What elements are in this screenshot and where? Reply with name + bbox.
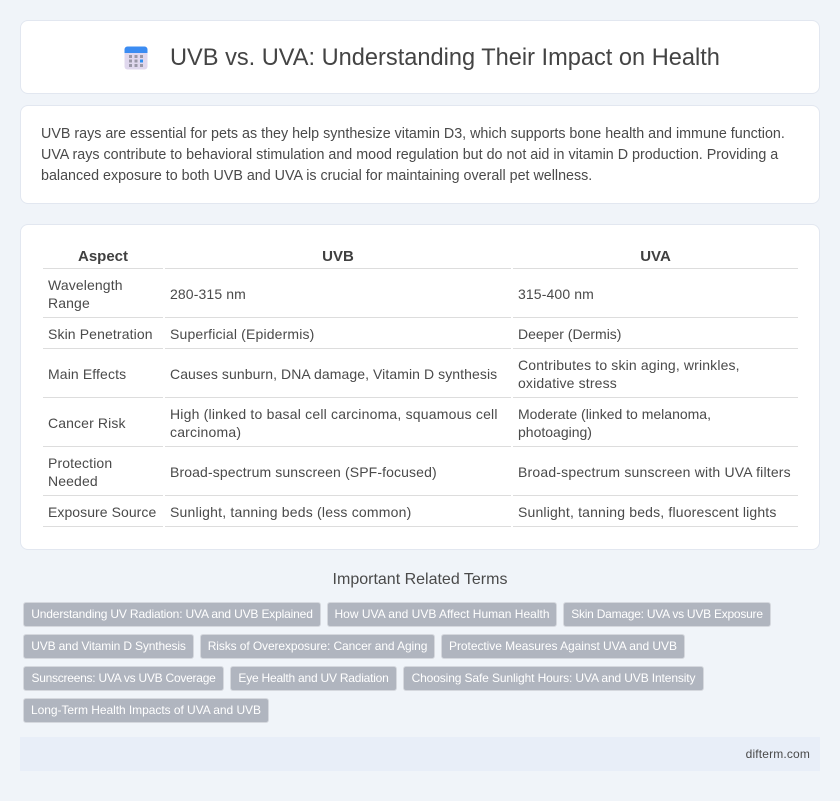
intro paragraph: UVA rays contribute to behavioral stimulation and mood regulation but do not aid in vitamin D production. Providing a [41, 147, 778, 163]
related terms tags: Skin Damage: UVA vs UVB Exposure [571, 607, 763, 621]
row: skin penetration: Skin Penetration [48, 326, 153, 342]
row: exposure source [48, 504, 777, 520]
related terms tags: Understanding UV Radiation: UVA and UVB Explained [31, 607, 313, 621]
comparison table panel [20, 224, 820, 550]
row: wavelength range: 315-400 nm [518, 286, 594, 302]
row: protection needed: Broad-spectrum sunscreen (SPF-focused) [170, 464, 437, 480]
intro paragraph [41, 126, 785, 184]
row: exposure source: Sunlight, tanning beds (less common) [170, 504, 411, 520]
intro paragraph: UVB rays are essential for pets as they help synthesize vitamin D3, which supports bone health and immune function. [41, 126, 785, 142]
related terms tags: Protective Measures Against UVA and UVB [449, 639, 677, 653]
row: main effects: Main Effects [48, 366, 126, 382]
row: wavelength range: Range [48, 295, 90, 311]
related terms tags: Risks of Overexposure: Cancer and Aging [208, 639, 427, 653]
table header [78, 248, 671, 265]
row: main effects: Contributes to skin aging, wrinkles, [518, 357, 740, 373]
row: skin penetration: Deeper (Dermis) [518, 326, 621, 342]
row: wavelength range: 280-315 nm [170, 286, 246, 302]
row: exposure source: Sunlight, tanning beds, fluorescent lights [518, 504, 777, 520]
table header: UVB [322, 248, 354, 265]
row: cancer risk: Moderate (linked to melanoma, [518, 406, 711, 422]
header panel [20, 20, 820, 94]
footer bar [20, 737, 820, 771]
row: main effects: oxidative stress [518, 375, 617, 391]
row: protection needed: Needed [48, 473, 98, 489]
related terms tags: Sunscreens: UVA vs UVB Coverage [31, 671, 216, 685]
row: skin penetration [48, 326, 621, 342]
row: exposure source: Exposure Source [48, 504, 156, 520]
row: cancer risk: High (linked to basal cell carcinoma, squamous cell [170, 406, 498, 422]
row: cancer risk: Cancer Risk [48, 415, 126, 431]
row: wavelength range [48, 277, 594, 311]
related terms tags: How UVA and UVB Affect Human Health [334, 607, 550, 621]
row: skin penetration: Superficial (Epidermis) [170, 326, 315, 342]
related terms tags: Eye Health and UV Radiation [238, 671, 389, 685]
row: cancer risk [48, 406, 711, 440]
row: protection needed [48, 455, 791, 489]
related terms tags: Long-Term Health Impacts of UVA and UVB [31, 703, 261, 717]
table header: Aspect [78, 248, 128, 265]
related terms tags: UVB and Vitamin D Synthesis [31, 639, 186, 653]
row: wavelength range: Wavelength [48, 277, 123, 293]
related terms tags [23, 602, 771, 723]
row: protection needed: Protection [48, 455, 112, 471]
related terms heading: Important Related Terms [333, 571, 507, 588]
row: main effects: Causes sunburn, DNA damage, Vitamin D synthesis [170, 366, 497, 382]
row: protection needed: Broad-spectrum sunscreen with UVA filters [518, 464, 791, 480]
row: cancer risk: carcinoma) [170, 424, 241, 440]
related terms tags: Choosing Safe Sunlight Hours: UVA and UVB Intensity [412, 671, 695, 685]
icon: calendar [124, 46, 148, 70]
intro text panel [20, 105, 820, 204]
title: UVB vs. UVA: Understanding Their Impact on Health [170, 45, 720, 71]
footer brand: difterm.com [746, 747, 810, 761]
row: main effects [48, 357, 740, 391]
intro paragraph: balanced exposure to both UVB and UVA is crucial for maintaining overall pet wellness. [41, 168, 592, 184]
row: cancer risk: photoaging) [518, 424, 592, 440]
table header: UVA [640, 248, 671, 265]
